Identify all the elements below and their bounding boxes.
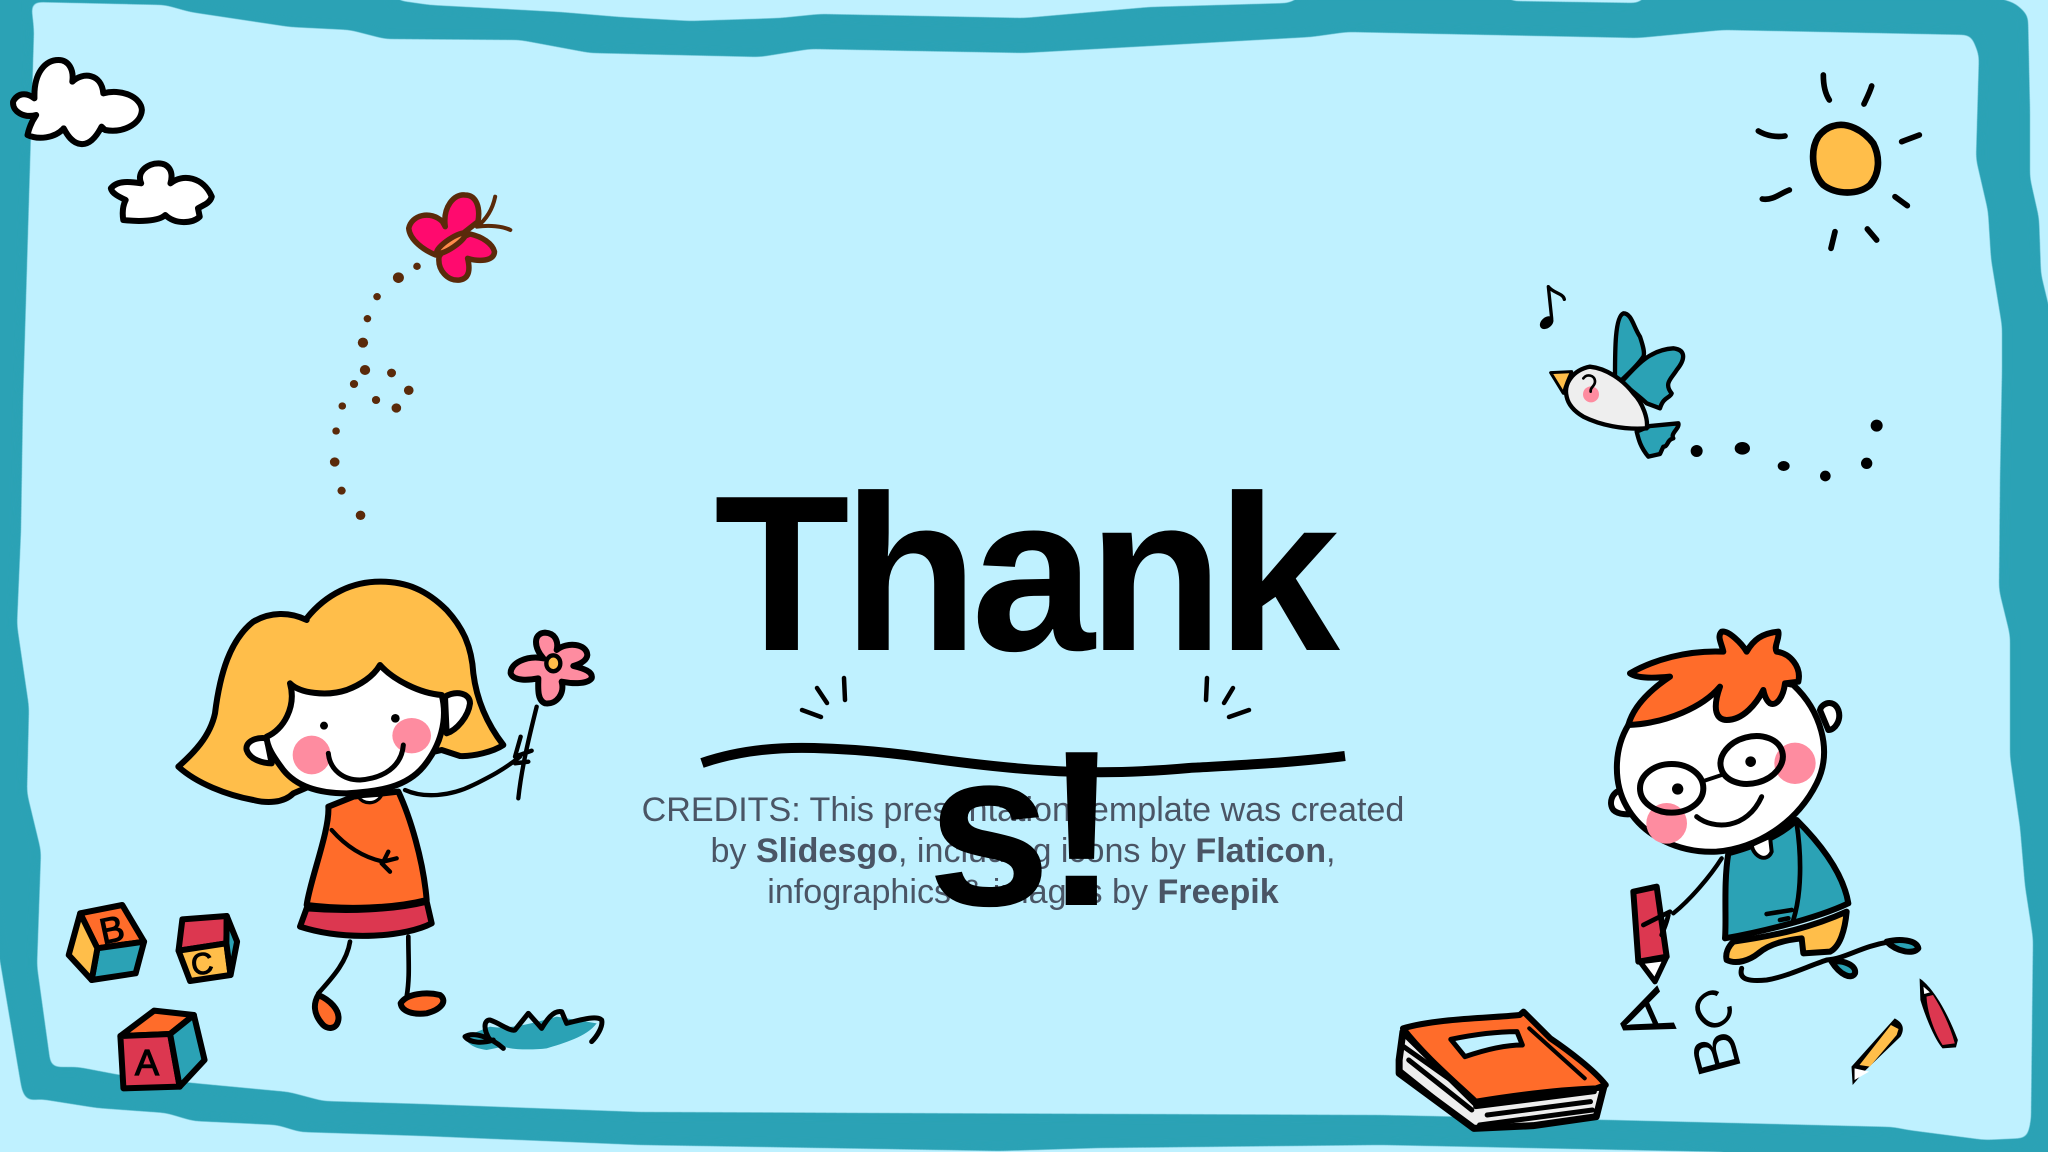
shoes bbox=[1832, 940, 1918, 976]
bird flight dots bbox=[1691, 420, 1883, 481]
glasses bbox=[1640, 729, 1788, 813]
pencil barrel bbox=[1926, 995, 1955, 1045]
lower wings bbox=[439, 234, 494, 280]
ears bbox=[1611, 703, 1839, 814]
upper wings bbox=[409, 195, 479, 255]
collar bbox=[358, 795, 382, 803]
block C bbox=[179, 916, 237, 981]
block B bbox=[69, 905, 144, 980]
yellow pencil bbox=[1851, 1018, 1903, 1085]
shoes bbox=[315, 993, 443, 1028]
head bbox=[1617, 660, 1824, 852]
note head bbox=[1537, 314, 1556, 332]
cheek bbox=[1583, 386, 1599, 402]
body bbox=[1566, 367, 1647, 429]
eye bbox=[1583, 375, 1595, 392]
title line 1: Thank bbox=[714, 450, 1340, 698]
smile bbox=[328, 745, 403, 780]
grass fill bbox=[465, 1017, 597, 1050]
left sparks bbox=[802, 678, 845, 717]
pencil outline bbox=[1920, 978, 1958, 1048]
legs and shoes bbox=[1741, 942, 1890, 981]
cloud large bbox=[13, 60, 142, 144]
cheeks bbox=[293, 718, 431, 774]
cover bbox=[1403, 1012, 1606, 1102]
cloud small bbox=[111, 163, 212, 222]
butterfly flight dots bbox=[330, 263, 421, 520]
front wing bbox=[1622, 348, 1683, 408]
dress bbox=[307, 792, 427, 908]
pencil outline bbox=[1851, 1018, 1903, 1085]
mouth bbox=[1697, 797, 1762, 825]
cheeks bbox=[1646, 743, 1816, 844]
collar bbox=[1752, 837, 1772, 858]
block A bbox=[120, 1011, 205, 1088]
butterfly body bbox=[434, 230, 468, 256]
drawn letter C: C bbox=[1680, 976, 1746, 1045]
sweater arm bbox=[1767, 823, 1800, 920]
back wing bbox=[1615, 313, 1644, 382]
hair bbox=[1628, 632, 1799, 725]
red pencil bbox=[1920, 978, 1958, 1048]
wavy divider bbox=[702, 748, 1345, 772]
bird bbox=[1551, 313, 1683, 457]
antennae bbox=[477, 197, 510, 230]
sun disc bbox=[1813, 125, 1878, 192]
grass tuft bbox=[465, 1011, 602, 1050]
sun rays bbox=[1758, 75, 1919, 248]
arm on dress bbox=[332, 830, 397, 872]
letter A: A bbox=[135, 1042, 159, 1083]
credits text: CREDITS: This presentation template was created bbox=[642, 791, 1404, 829]
ears bbox=[246, 693, 470, 763]
pencil tip bbox=[1855, 1068, 1869, 1080]
pencil barrel bbox=[1860, 1025, 1899, 1067]
toy blocks bbox=[69, 905, 237, 1088]
pants bbox=[1726, 912, 1847, 962]
raised arm bbox=[405, 757, 520, 795]
hair bbox=[178, 582, 503, 802]
flower stem and fingers bbox=[515, 707, 537, 798]
pencil tip bbox=[1923, 987, 1930, 994]
pencil body bbox=[1633, 887, 1667, 962]
hand bbox=[1643, 912, 1670, 935]
credits text line 2: by Slidesgo, including icons by Flaticon, bbox=[710, 832, 1336, 870]
notebook stack bbox=[1399, 1012, 1606, 1128]
flower centre bbox=[546, 655, 560, 671]
tail bbox=[1637, 423, 1679, 457]
beak bbox=[1551, 372, 1572, 393]
cover spine line bbox=[1529, 1028, 1585, 1078]
cover label bbox=[1451, 1032, 1522, 1057]
flower bbox=[511, 633, 592, 703]
butterfly bbox=[409, 195, 510, 280]
credits text line 3: infographics & images by Freepik bbox=[767, 873, 1279, 911]
pencil arm bbox=[1673, 858, 1722, 913]
page lines bbox=[1399, 1047, 1594, 1125]
grass outline bbox=[465, 1011, 602, 1048]
drawn letter A: A bbox=[1599, 979, 1691, 1055]
sweater bbox=[1725, 820, 1848, 938]
letter C: C bbox=[189, 947, 215, 982]
face bbox=[267, 665, 444, 793]
eyes bbox=[1672, 756, 1756, 795]
skirt bbox=[300, 902, 432, 936]
pencil tip bbox=[1640, 958, 1666, 982]
eyes bbox=[320, 714, 400, 730]
music note bbox=[1537, 287, 1564, 332]
legs bbox=[318, 937, 409, 997]
boy with glasses bbox=[1611, 632, 1918, 982]
note stem bbox=[1548, 287, 1564, 318]
drawn letter B: B bbox=[1678, 1025, 1755, 1083]
girl with flower bbox=[178, 582, 592, 1028]
sun bbox=[1758, 75, 1919, 248]
title line 2: s! bbox=[927, 705, 1113, 953]
right sparks bbox=[1206, 678, 1249, 717]
letter B: B bbox=[96, 907, 128, 952]
pages bbox=[1399, 1032, 1604, 1128]
